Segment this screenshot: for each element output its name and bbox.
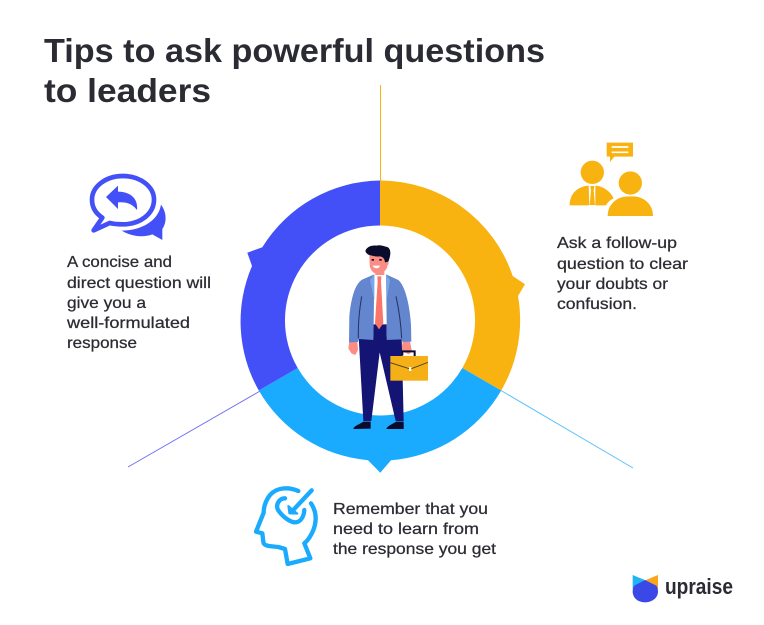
- text: concise question: [66, 254, 211, 352]
- text: learn from the response: [333, 501, 497, 558]
- connector line: top: [380, 85, 382, 182]
- hair: [365, 245, 390, 262]
- text: concise question: response: [67, 335, 137, 352]
- text: follow-up question: question to clear: [557, 256, 689, 273]
- speech bubble lines: [612, 147, 628, 152]
- shoes: [353, 422, 404, 429]
- jacket seams: [358, 296, 402, 338]
- ring segment: blue: [259, 368, 501, 473]
- icon: reply speech bubbles: [92, 176, 166, 240]
- right hand: [401, 342, 412, 354]
- illustration: businessman: [348, 245, 428, 429]
- jacket: [349, 274, 411, 342]
- arrow head: [288, 506, 297, 514]
- shirt: [373, 274, 387, 324]
- person two head: [619, 171, 642, 195]
- person one head: [581, 161, 604, 184]
- face: [369, 255, 387, 274]
- briefcase clasp: [409, 367, 411, 371]
- arrow shaft: [293, 490, 312, 511]
- text: follow-up question: Ask a follow-up: [557, 235, 677, 252]
- person one body: [570, 186, 614, 205]
- text: concise question: give you a: [67, 295, 146, 312]
- text: concise question: direct question will: [67, 275, 211, 292]
- text: concise question: A concise and: [67, 254, 172, 271]
- briefcase flap: [390, 362, 428, 369]
- text: follow-up question: confusion.: [557, 296, 637, 313]
- title: [44, 32, 545, 109]
- back bubble: [122, 205, 166, 240]
- main bubble: [92, 176, 154, 230]
- neck: [375, 268, 384, 275]
- person one tie: [590, 186, 595, 205]
- person two body: [608, 196, 653, 216]
- speech bubble: [607, 143, 633, 162]
- smile: [373, 266, 380, 268]
- text: follow-up question: [557, 235, 689, 313]
- logo: upraise: [633, 574, 733, 602]
- text: learn from the response: Remember that you: [333, 501, 488, 518]
- icon: head with target: [256, 488, 316, 564]
- title: Tips to ask powerful questions: [44, 32, 545, 69]
- logo right ear: [645, 575, 658, 589]
- ring segment: indigo: [241, 180, 380, 390]
- briefcase handle: [402, 351, 415, 356]
- icon: two people talking: [570, 143, 653, 216]
- text: follow-up question: your doubts or: [557, 276, 669, 293]
- title: to leaders: [44, 72, 211, 109]
- logo left ear: [633, 575, 646, 589]
- text: learn from the response: the response you get: [333, 541, 497, 558]
- ring segment: yellow: [380, 180, 525, 390]
- donut ring: [241, 180, 525, 473]
- ear: [385, 260, 389, 266]
- logo face: [633, 580, 658, 602]
- connector line: right: [501, 390, 633, 468]
- text: concise question: well-formulated: [66, 315, 190, 332]
- logo wordmark: upraise: [665, 574, 733, 599]
- connector line: left: [128, 390, 261, 467]
- tie: [375, 276, 383, 329]
- trousers: [359, 322, 404, 421]
- eyes and brows: [372, 259, 382, 261]
- logo mark: [633, 575, 658, 602]
- briefcase: [390, 356, 428, 381]
- left hand: [348, 342, 358, 355]
- text: learn from the response: need to learn from: [333, 521, 479, 538]
- head outline: [256, 488, 316, 564]
- target ring: [277, 498, 304, 522]
- reply arrow: [106, 186, 137, 210]
- lapels: [370, 274, 390, 300]
